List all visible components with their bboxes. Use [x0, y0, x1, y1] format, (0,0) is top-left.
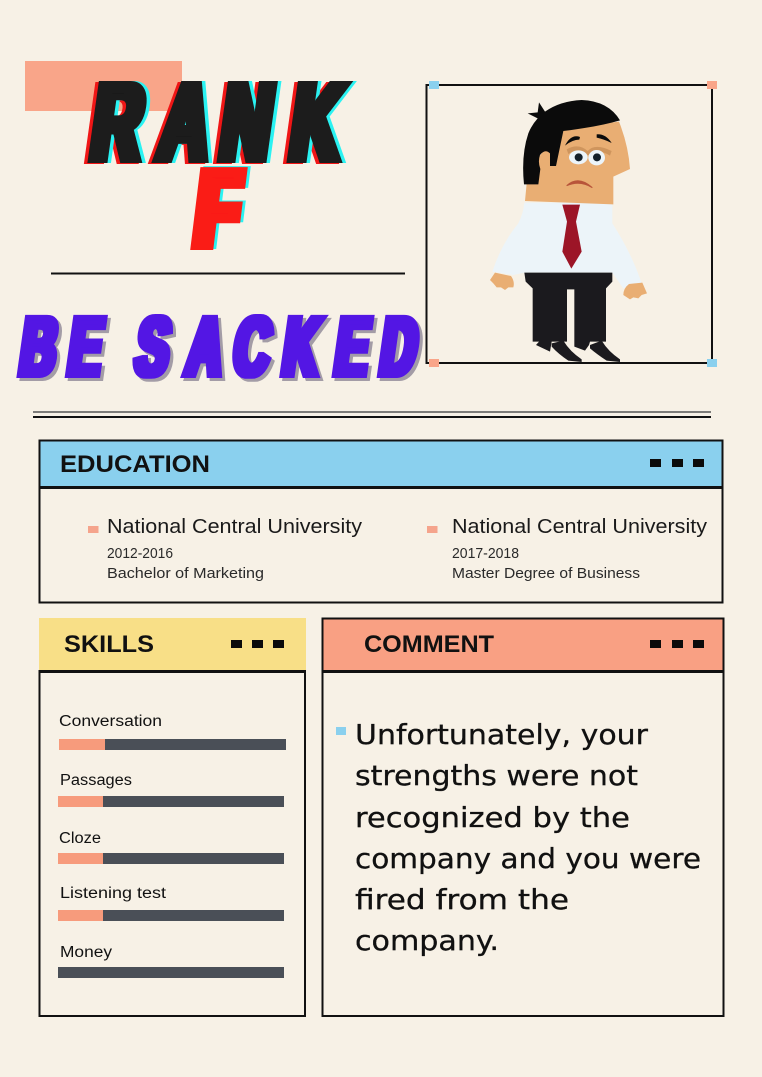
title: BE SACKED: BE SACKED — [18, 304, 426, 396]
dots — [231, 640, 284, 648]
bullet — [336, 727, 346, 735]
skill bar: passages: Passages — [60, 772, 132, 789]
education entry 2: Master Degree of Business — [452, 566, 640, 582]
education entry 1: 2012-2016 — [107, 546, 173, 562]
education entry 1: Bachelor of Marketing — [107, 566, 264, 582]
skill bar: conversation: Conversation — [59, 713, 162, 730]
comment text: strengths were not — [355, 759, 638, 792]
panel: comment — [322, 618, 724, 1016]
comment text: Unfortunately, your — [355, 718, 649, 751]
decorative salmon block behind title — [25, 61, 182, 111]
skill bar: money: Money — [60, 944, 112, 961]
panel: skills — [39, 618, 306, 1016]
education entry 1: National Central University — [107, 516, 362, 538]
skill bar: listening test — [58, 885, 284, 921]
comment text: company and you were — [355, 842, 701, 875]
comment text: fired from the — [355, 883, 569, 916]
skill bar: conversation — [59, 713, 286, 750]
dots — [650, 459, 704, 467]
title: RANK: RANK — [82, 63, 347, 184]
comment text — [355, 718, 701, 957]
heading: skills: SKILLS — [64, 631, 154, 658]
comment text: recognized by the — [355, 801, 630, 834]
skill bar: cloze — [58, 830, 284, 864]
title: RANK: RANK — [85, 62, 350, 183]
panel: education — [39, 440, 723, 602]
heading: comment: COMMENT — [364, 631, 494, 658]
skill bar: passages — [58, 772, 284, 807]
skill bar: cloze: Cloze — [59, 830, 101, 847]
education entry 2 — [427, 516, 707, 582]
education entry 2: 2017-2018 — [452, 546, 519, 562]
dots — [650, 640, 704, 648]
comment text: company. — [355, 924, 499, 957]
skill bar: money — [58, 944, 284, 978]
heading: education: EDUCATION — [60, 451, 210, 478]
title: RANK: RANK — [89, 62, 354, 183]
education entry 1 — [88, 516, 362, 582]
title: F: F — [190, 149, 246, 268]
title: F: F — [193, 148, 249, 267]
icon: sad fired employee — [490, 100, 647, 362]
portrait frame — [426, 81, 717, 367]
title: BE SACKED: BE SACKED — [15, 301, 423, 393]
education entry 2: National Central University — [452, 516, 707, 538]
skill bar: listening test: Listening test — [60, 885, 167, 902]
education header — [40, 442, 722, 486]
